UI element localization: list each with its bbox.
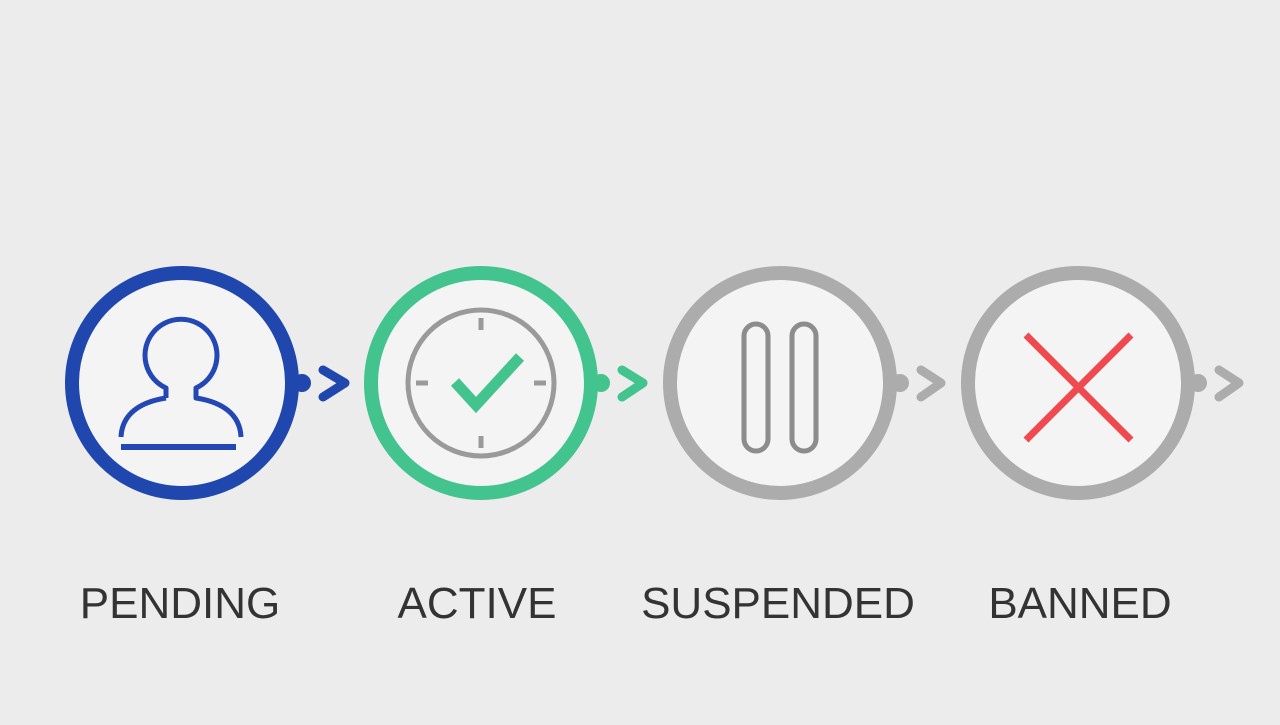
stage: active <box>371 273 643 493</box>
arrow: suspended to banned <box>891 370 941 397</box>
arrow: pending to active <box>293 370 345 397</box>
icon: red x <box>1026 335 1131 440</box>
labels: PENDING <box>80 579 280 628</box>
icon: person <box>121 319 241 447</box>
labels: ACTIVE <box>398 579 556 628</box>
icon: pause <box>744 324 816 451</box>
arrow: active to suspended <box>592 370 643 397</box>
stage: banned <box>968 273 1239 493</box>
icon: clock with check <box>408 310 554 456</box>
stage: suspended <box>670 273 941 493</box>
labels: SUSPENDED <box>641 579 915 628</box>
arrow: banned onward <box>1189 370 1239 397</box>
labels: BANNED <box>988 579 1172 628</box>
labels <box>80 579 1172 628</box>
stage: pending <box>72 273 345 493</box>
